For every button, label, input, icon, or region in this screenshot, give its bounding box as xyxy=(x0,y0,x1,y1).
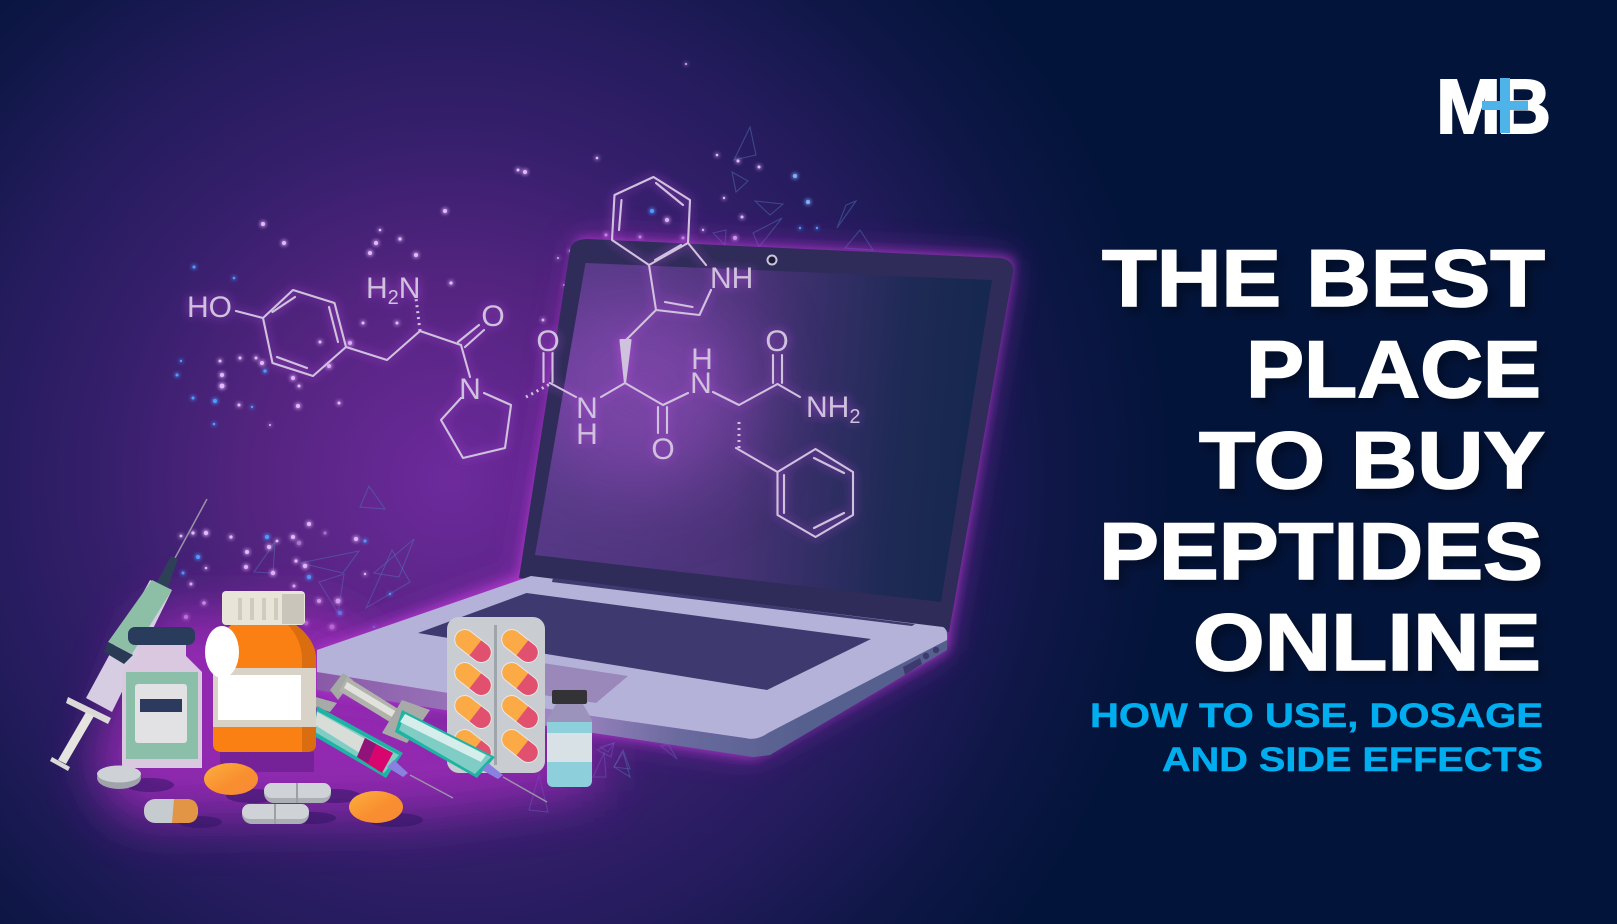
syringe teal pink xyxy=(312,696,453,798)
subtitle: HOW TO USE, DOSAGE xyxy=(1090,697,1543,735)
atom labels xyxy=(187,262,860,466)
central chain xyxy=(544,353,800,433)
atom labels: O xyxy=(481,300,505,333)
atom labels: N xyxy=(576,392,598,425)
left ring xyxy=(236,290,346,376)
atom labels: O xyxy=(765,325,789,358)
laptop glow xyxy=(317,239,1013,757)
atom labels: N xyxy=(399,272,420,305)
trackpad xyxy=(470,652,628,703)
title xyxy=(1099,234,1545,688)
atom labels: N xyxy=(459,373,481,406)
subtitle xyxy=(1090,697,1543,779)
logo: M xyxy=(1436,64,1501,150)
atom labels: H xyxy=(366,272,388,305)
title: TO BUY xyxy=(1199,416,1545,506)
medicines xyxy=(50,499,592,828)
pyrrolidine xyxy=(441,393,511,458)
laptop screen xyxy=(535,263,992,602)
triangle particles xyxy=(254,127,873,812)
right ring xyxy=(736,448,853,537)
title: THE BEST xyxy=(1102,234,1545,324)
title: PEPTIDES xyxy=(1099,507,1543,597)
webcam xyxy=(768,256,776,264)
logo xyxy=(1436,64,1551,150)
hash bonds xyxy=(416,298,739,448)
wedge bond xyxy=(620,340,630,383)
orange bottle xyxy=(205,591,316,772)
atom labels: O xyxy=(651,433,675,466)
molecule diagram xyxy=(187,177,860,537)
atom labels: N xyxy=(690,367,712,400)
atom labels: HO xyxy=(187,291,232,324)
white blob xyxy=(205,626,239,678)
laptop lid xyxy=(519,239,1013,632)
title: PLACE xyxy=(1246,325,1541,415)
glow behind medicines xyxy=(90,610,600,820)
atom labels: 2 xyxy=(388,287,399,309)
screen glow xyxy=(530,290,750,490)
atom labels: O xyxy=(536,325,560,358)
atom labels: H xyxy=(691,343,713,376)
vial left xyxy=(122,627,202,768)
laptop base side xyxy=(317,630,947,757)
syringe teal xyxy=(330,673,547,802)
star particles xyxy=(176,63,818,629)
hinge xyxy=(552,578,915,626)
floor shadows xyxy=(126,778,423,828)
ports xyxy=(903,647,939,675)
blister pack xyxy=(447,617,545,773)
subtitle: AND SIDE EFFECTS xyxy=(1162,741,1543,779)
laptop base top xyxy=(317,576,947,739)
atom labels: H xyxy=(576,418,598,451)
plus mark xyxy=(1482,78,1528,133)
syringe left xyxy=(50,499,207,771)
atom labels: NH xyxy=(710,262,753,295)
atom labels: 2 xyxy=(849,406,860,428)
indole xyxy=(612,177,711,340)
pills xyxy=(97,763,403,824)
laptop xyxy=(317,239,1013,757)
title: ONLINE xyxy=(1193,598,1541,688)
atom labels: NH xyxy=(806,391,849,424)
keyboard xyxy=(418,593,871,690)
small vial xyxy=(547,690,592,787)
logo: B xyxy=(1497,64,1551,150)
chain xyxy=(346,325,484,377)
